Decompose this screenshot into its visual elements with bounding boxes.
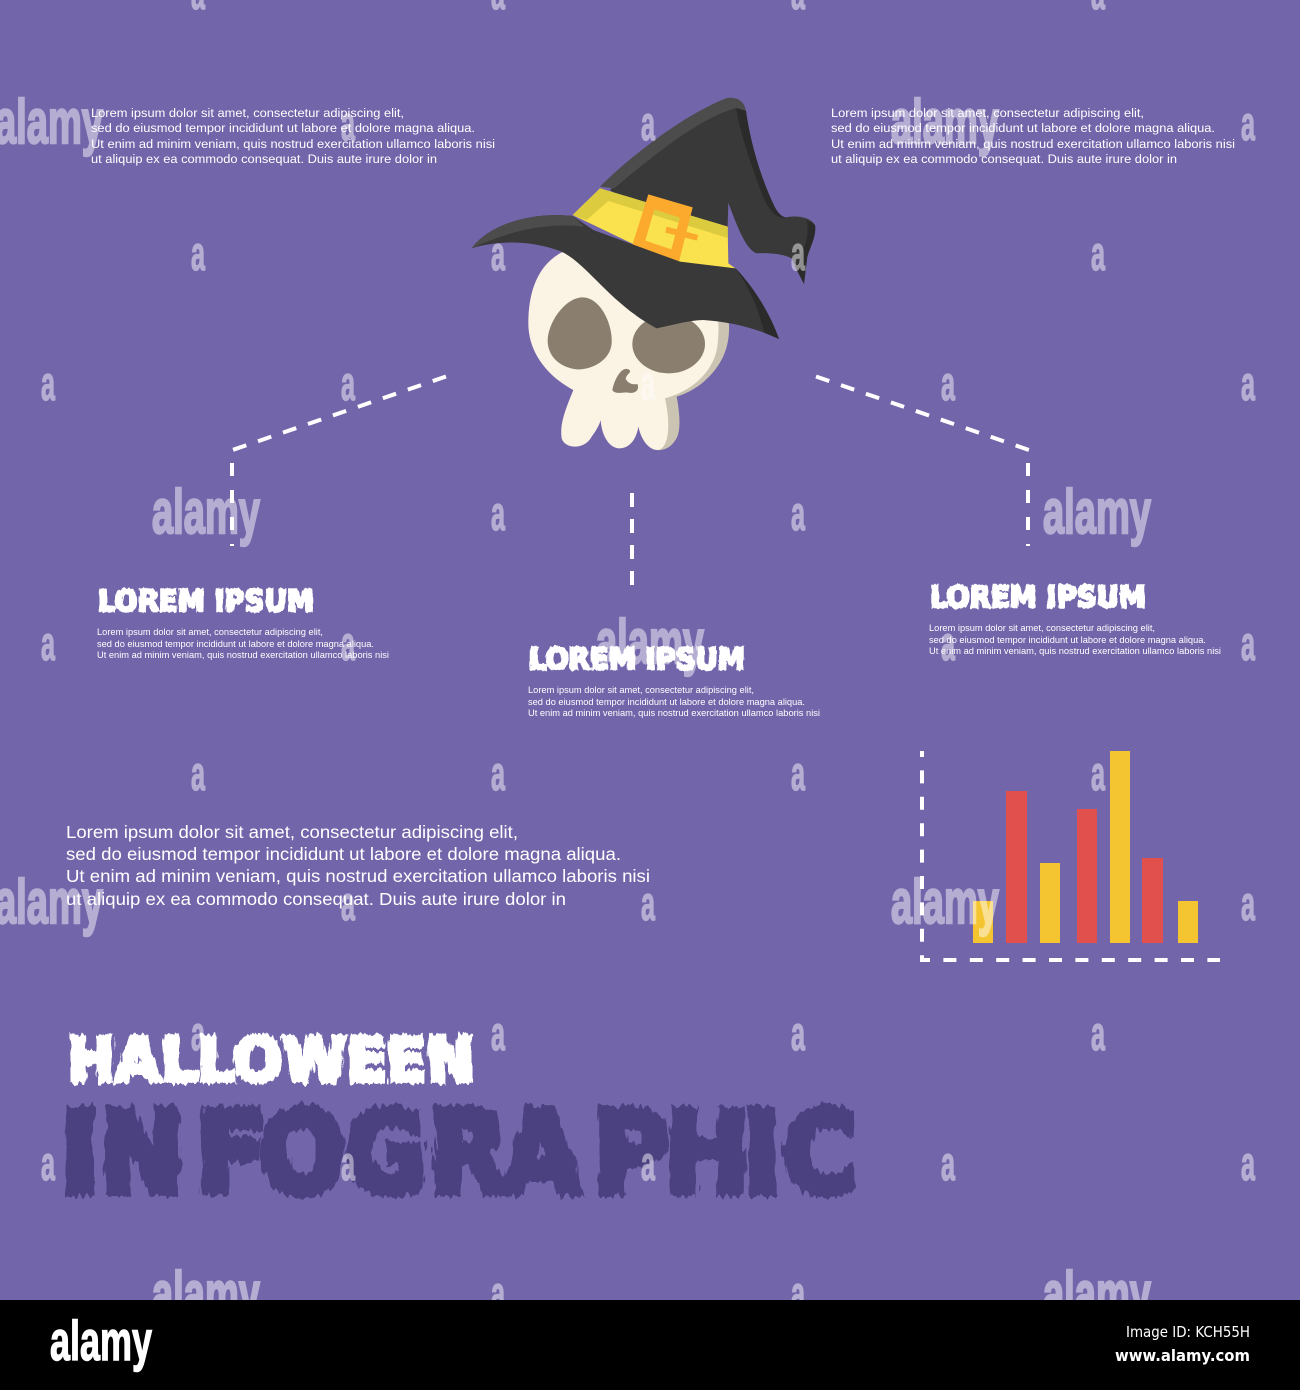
watermark pattern: alamy [152, 1260, 260, 1329]
text block: top left [91, 106, 495, 166]
text block: centre: Ut enim ad minim veniam, quis nostrud exercitation ullamco laboris nisi [528, 708, 820, 718]
website: www.alamy.com [1115, 1346, 1250, 1365]
text block: large: Lorem ipsum dolor sit amet, consectetur adipiscing elit, [66, 822, 518, 842]
watermark pattern: a [341, 878, 355, 931]
watermark pattern: a [191, 748, 205, 801]
watermark pattern: alamy [0, 88, 103, 157]
watermark pattern: a [191, 228, 205, 281]
watermark pattern: a [1091, 228, 1105, 281]
title: infographic: INFOGRAPHIC [61, 1089, 856, 1219]
text block: right: Ut enim ad minim veniam, quis nostrud exercitation ullamco laboris nisi [929, 646, 1221, 656]
chart axes [920, 751, 1220, 962]
watermark pattern: a [941, 1138, 955, 1191]
watermark pattern: alamy [1043, 478, 1151, 547]
text block: left: Ut enim ad minim veniam, quis nostrud exercitation ullamco laboris nisi [97, 650, 389, 660]
watermark pattern: a [341, 1138, 355, 1191]
watermark pattern: a [341, 358, 355, 411]
text block: top left: sed do eiusmod tempor incididunt ut labore et dolore magna aliqua. [91, 121, 475, 135]
hat band [573, 188, 737, 269]
watermark pattern: a [1241, 878, 1255, 931]
text block: right [929, 623, 1221, 656]
watermark pattern: a [1241, 1138, 1255, 1191]
dashed connector: centre [630, 493, 634, 585]
text block: left: Lorem ipsum dolor sit amet, consectetur adipiscing elit, [97, 627, 323, 637]
heading: left: LOREM IPSUM [98, 584, 314, 618]
title: halloween: HALLOWEEN [67, 1025, 475, 1096]
watermark pattern: a [641, 1138, 655, 1191]
text block: left: sed do eiusmod tempor incididunt ut labore et dolore magna aliqua. [97, 639, 374, 649]
watermark pattern: a [791, 228, 805, 281]
watermark pattern: alamy [0, 868, 103, 937]
watermark pattern: alamy [891, 868, 999, 937]
watermark pattern: a [341, 98, 355, 151]
text block: centre: sed do eiusmod tempor incididunt ut labore et dolore magna aliqua. [528, 697, 805, 707]
hat buckle [632, 194, 698, 262]
text block: large [66, 822, 650, 909]
watermark pattern: a [791, 488, 805, 541]
text block: top right: Lorem ipsum dolor sit amet, consectetur adipiscing elit, [831, 106, 1144, 120]
hat cone highlight [600, 98, 746, 188]
text block: top left: ut aliquip ex ea commodo consequat. Duis aute irure dolor in [91, 152, 437, 166]
watermark pattern: a [1091, 748, 1105, 801]
watermark pattern: a [1241, 358, 1255, 411]
brim shadow edge [736, 268, 779, 339]
watermark pattern: a [641, 358, 655, 411]
text block: large: ut aliquip ex ea commodo consequat. Duis aute irure dolor in [66, 889, 566, 909]
text block: top left: Ut enim ad minim veniam, quis nostrud exercitation ullamco laboris nisi [91, 137, 495, 151]
watermark pattern: alamy [891, 88, 999, 157]
footer logo: alamy [50, 1309, 152, 1372]
watermark pattern: a [791, 748, 805, 801]
brim highlight [472, 215, 584, 248]
text block: top right: sed do eiusmod tempor incididunt ut labore et dolore magna aliqua. [831, 121, 1215, 135]
text block: top right: Ut enim ad minim veniam, quis nostrud exercitation ullamco laboris nisi [831, 137, 1235, 151]
hat band shade [573, 188, 728, 238]
text block: top left: Lorem ipsum dolor sit amet, consectetur adipiscing elit, [91, 106, 404, 120]
hat brim [472, 215, 779, 339]
watermark pattern: a [791, 1008, 805, 1061]
watermark pattern: a [941, 358, 955, 411]
hat fold shadow [795, 220, 815, 284]
watermark pattern: a [341, 618, 355, 671]
bars [973, 751, 1198, 943]
watermark pattern: a [641, 98, 655, 151]
nose [612, 369, 638, 393]
heading: centre: LOREM IPSUM [529, 642, 745, 676]
hat cone [610, 107, 815, 284]
eye sockets [548, 297, 705, 373]
dashed connector: right [816, 376, 1029, 546]
text block: right: sed do eiusmod tempor incididunt ut labore et dolore magna aliqua. [929, 635, 1206, 645]
skull shadow [647, 277, 729, 450]
watermark pattern: a [491, 228, 505, 281]
watermark pattern: a [641, 878, 655, 931]
watermark pattern: a [1091, 1008, 1105, 1061]
watermark pattern: a [491, 1268, 505, 1321]
watermark pattern: a [491, 1008, 505, 1061]
text block: centre: Lorem ipsum dolor sit amet, consectetur adipiscing elit, [528, 685, 754, 695]
watermark pattern: a [1241, 618, 1255, 671]
watermark pattern: a [941, 618, 955, 671]
text block: top right: ut aliquip ex ea commodo consequat. Duis aute irure dolor in [831, 152, 1177, 166]
hat cone shadow edge [736, 107, 786, 218]
watermark pattern: a [41, 358, 55, 411]
image id: Image ID: KCH55H [1126, 1323, 1250, 1341]
watermark pattern: alamy [152, 478, 260, 547]
text block: right: Lorem ipsum dolor sit amet, consectetur adipiscing elit, [929, 623, 1155, 633]
text block: centre [528, 685, 820, 718]
watermark pattern: a [191, 1008, 205, 1061]
heading: right: LOREM IPSUM [930, 580, 1146, 614]
watermark pattern: a [41, 1138, 55, 1191]
watermark pattern: a [491, 488, 505, 541]
footer bar [0, 1300, 1300, 1390]
text block: top right [831, 106, 1235, 166]
watermark pattern: alamy [596, 608, 704, 677]
icon: skull with witch hat [472, 98, 815, 450]
watermark pattern: a [1241, 98, 1255, 151]
text block: large: sed do eiusmod tempor incididunt ut labore et dolore magna aliqua. [66, 844, 621, 864]
text block: left [97, 627, 389, 660]
watermark pattern: a [491, 748, 505, 801]
watermark pattern: a [791, 1268, 805, 1321]
watermark pattern: alamy [1043, 1260, 1151, 1329]
watermark pattern: a [41, 618, 55, 671]
dashed connector: left [232, 376, 446, 546]
text block: large: Ut enim ad minim veniam, quis nostrud exercitation ullamco laboris nisi [66, 866, 650, 886]
skull [528, 252, 718, 450]
bar chart [920, 751, 1220, 962]
